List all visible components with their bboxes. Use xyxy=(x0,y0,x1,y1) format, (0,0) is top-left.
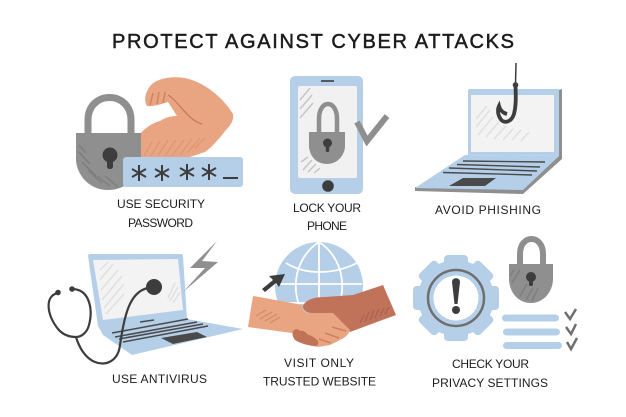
label: TRUSTED WEBSITE xyxy=(263,374,376,388)
icon: stethoscope xyxy=(49,279,162,363)
label: AVOID PHISHING xyxy=(435,203,541,217)
settings list xyxy=(502,314,562,349)
label: CHECK YOUR xyxy=(452,357,529,371)
label: USE ANTIVIRUS xyxy=(112,372,207,386)
panel: lock your phone xyxy=(290,76,387,233)
icon: gear with warning xyxy=(413,255,499,341)
icon: padlock xyxy=(76,98,141,190)
icon: padlock xyxy=(509,239,553,303)
panel: check your privacy settings xyxy=(413,239,577,390)
title: PROTECT AGAINST CYBER ATTACKS xyxy=(112,31,514,53)
panel: visit only trusted website xyxy=(248,242,396,388)
label: LOCK YOUR xyxy=(293,201,361,215)
label xyxy=(432,357,548,390)
label xyxy=(117,197,205,230)
check marks xyxy=(565,309,577,349)
icon: phone lock xyxy=(309,104,345,164)
panel: use antivirus xyxy=(49,241,243,386)
icon: lightning bolt xyxy=(183,241,218,292)
icon: laptop xyxy=(88,254,243,355)
label: PHONE xyxy=(307,219,347,233)
panel: use security password xyxy=(76,77,243,230)
label: PASSWORD xyxy=(128,216,193,230)
icon: fish hook xyxy=(498,63,518,122)
label: VISIT ONLY xyxy=(284,356,354,370)
icon: flexed arm xyxy=(139,77,233,158)
icon: phone xyxy=(290,76,363,194)
label: PRIVACY SETTINGS xyxy=(432,376,548,390)
password field xyxy=(123,157,243,187)
icon: globe xyxy=(275,242,363,330)
label xyxy=(293,201,361,233)
icon: cursor arrow xyxy=(262,274,285,292)
label xyxy=(263,356,376,388)
icon: check mark xyxy=(357,116,387,141)
panel: avoid phishing xyxy=(415,63,562,217)
icon: laptop xyxy=(415,89,562,194)
label: USE SECURITY xyxy=(117,197,205,211)
icon: handshake xyxy=(248,285,396,347)
